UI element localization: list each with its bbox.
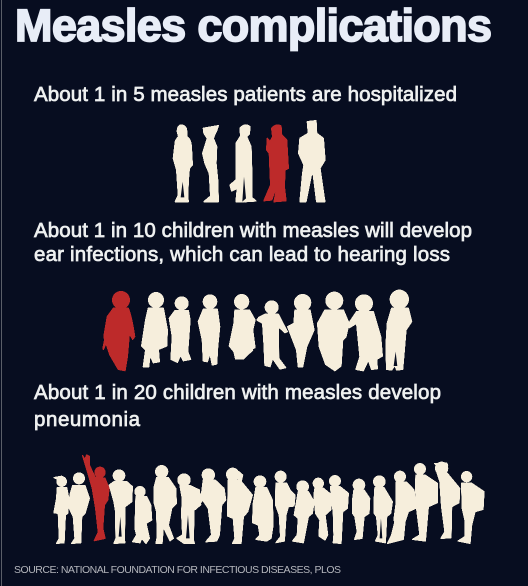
figure 11	[275, 471, 295, 543]
statement: 1 in 5 hospitalized: About 1 in 5 measles patients are hospitalized	[34, 83, 457, 106]
child 6	[257, 301, 287, 369]
child 7	[288, 295, 314, 367]
figure 6	[154, 466, 176, 543]
figure 17	[388, 471, 416, 543]
figure 8	[194, 469, 226, 542]
child 1, red	[103, 292, 135, 371]
figure 19	[435, 462, 460, 538]
adult 2	[203, 126, 218, 202]
figures 11 to 20	[275, 462, 484, 543]
row of 20 child silhouettes with backpacks	[54, 455, 484, 543]
figure 3, red with raised arm	[83, 455, 109, 541]
statement: 1 in 20 pneumonia	[34, 381, 441, 431]
figure 5	[133, 487, 152, 543]
figure 12	[293, 481, 314, 543]
statement: 1 in 10 ear infections: ear infections, which can lead to hearing loss	[34, 243, 450, 266]
figure 20	[458, 472, 484, 543]
source line: SOURCE: NATIONAL FOUNDATION FOR INFECTIOUS DISEASES, PLOS	[14, 564, 341, 576]
adult 3	[230, 125, 256, 202]
adult 4, red	[264, 125, 288, 202]
figure 1	[54, 476, 69, 543]
child 4	[198, 295, 220, 365]
statement: 1 in 20 pneumonia: About 1 in 20 children with measles develop	[34, 381, 441, 404]
figure 16	[374, 476, 392, 543]
figure 15	[353, 479, 370, 539]
figure 4	[109, 470, 132, 543]
row of 5 adult silhouettes	[173, 121, 325, 202]
figure 7	[177, 474, 201, 543]
adult 1	[173, 125, 192, 202]
title: Measles complications	[15, 0, 492, 51]
adult 5	[299, 121, 325, 202]
row of 10 child silhouettes	[103, 290, 412, 371]
figure 13	[313, 478, 332, 540]
figure 2	[69, 473, 89, 543]
figure 10	[253, 476, 273, 541]
figure 9	[227, 468, 252, 543]
child 9	[348, 295, 382, 371]
child 5	[229, 295, 255, 359]
child 3	[169, 297, 191, 362]
child 2	[142, 293, 167, 367]
statement: 1 in 20 pneumonia: pneumonia	[34, 408, 141, 431]
figure 14	[330, 476, 348, 543]
child 8	[318, 292, 349, 371]
child 10	[386, 290, 412, 370]
statement: 1 in 10 ear infections: About 1 in 10 children with measles will develop	[34, 219, 472, 242]
figure 18	[413, 464, 437, 541]
statement: 1 in 10 ear infections	[34, 219, 472, 266]
